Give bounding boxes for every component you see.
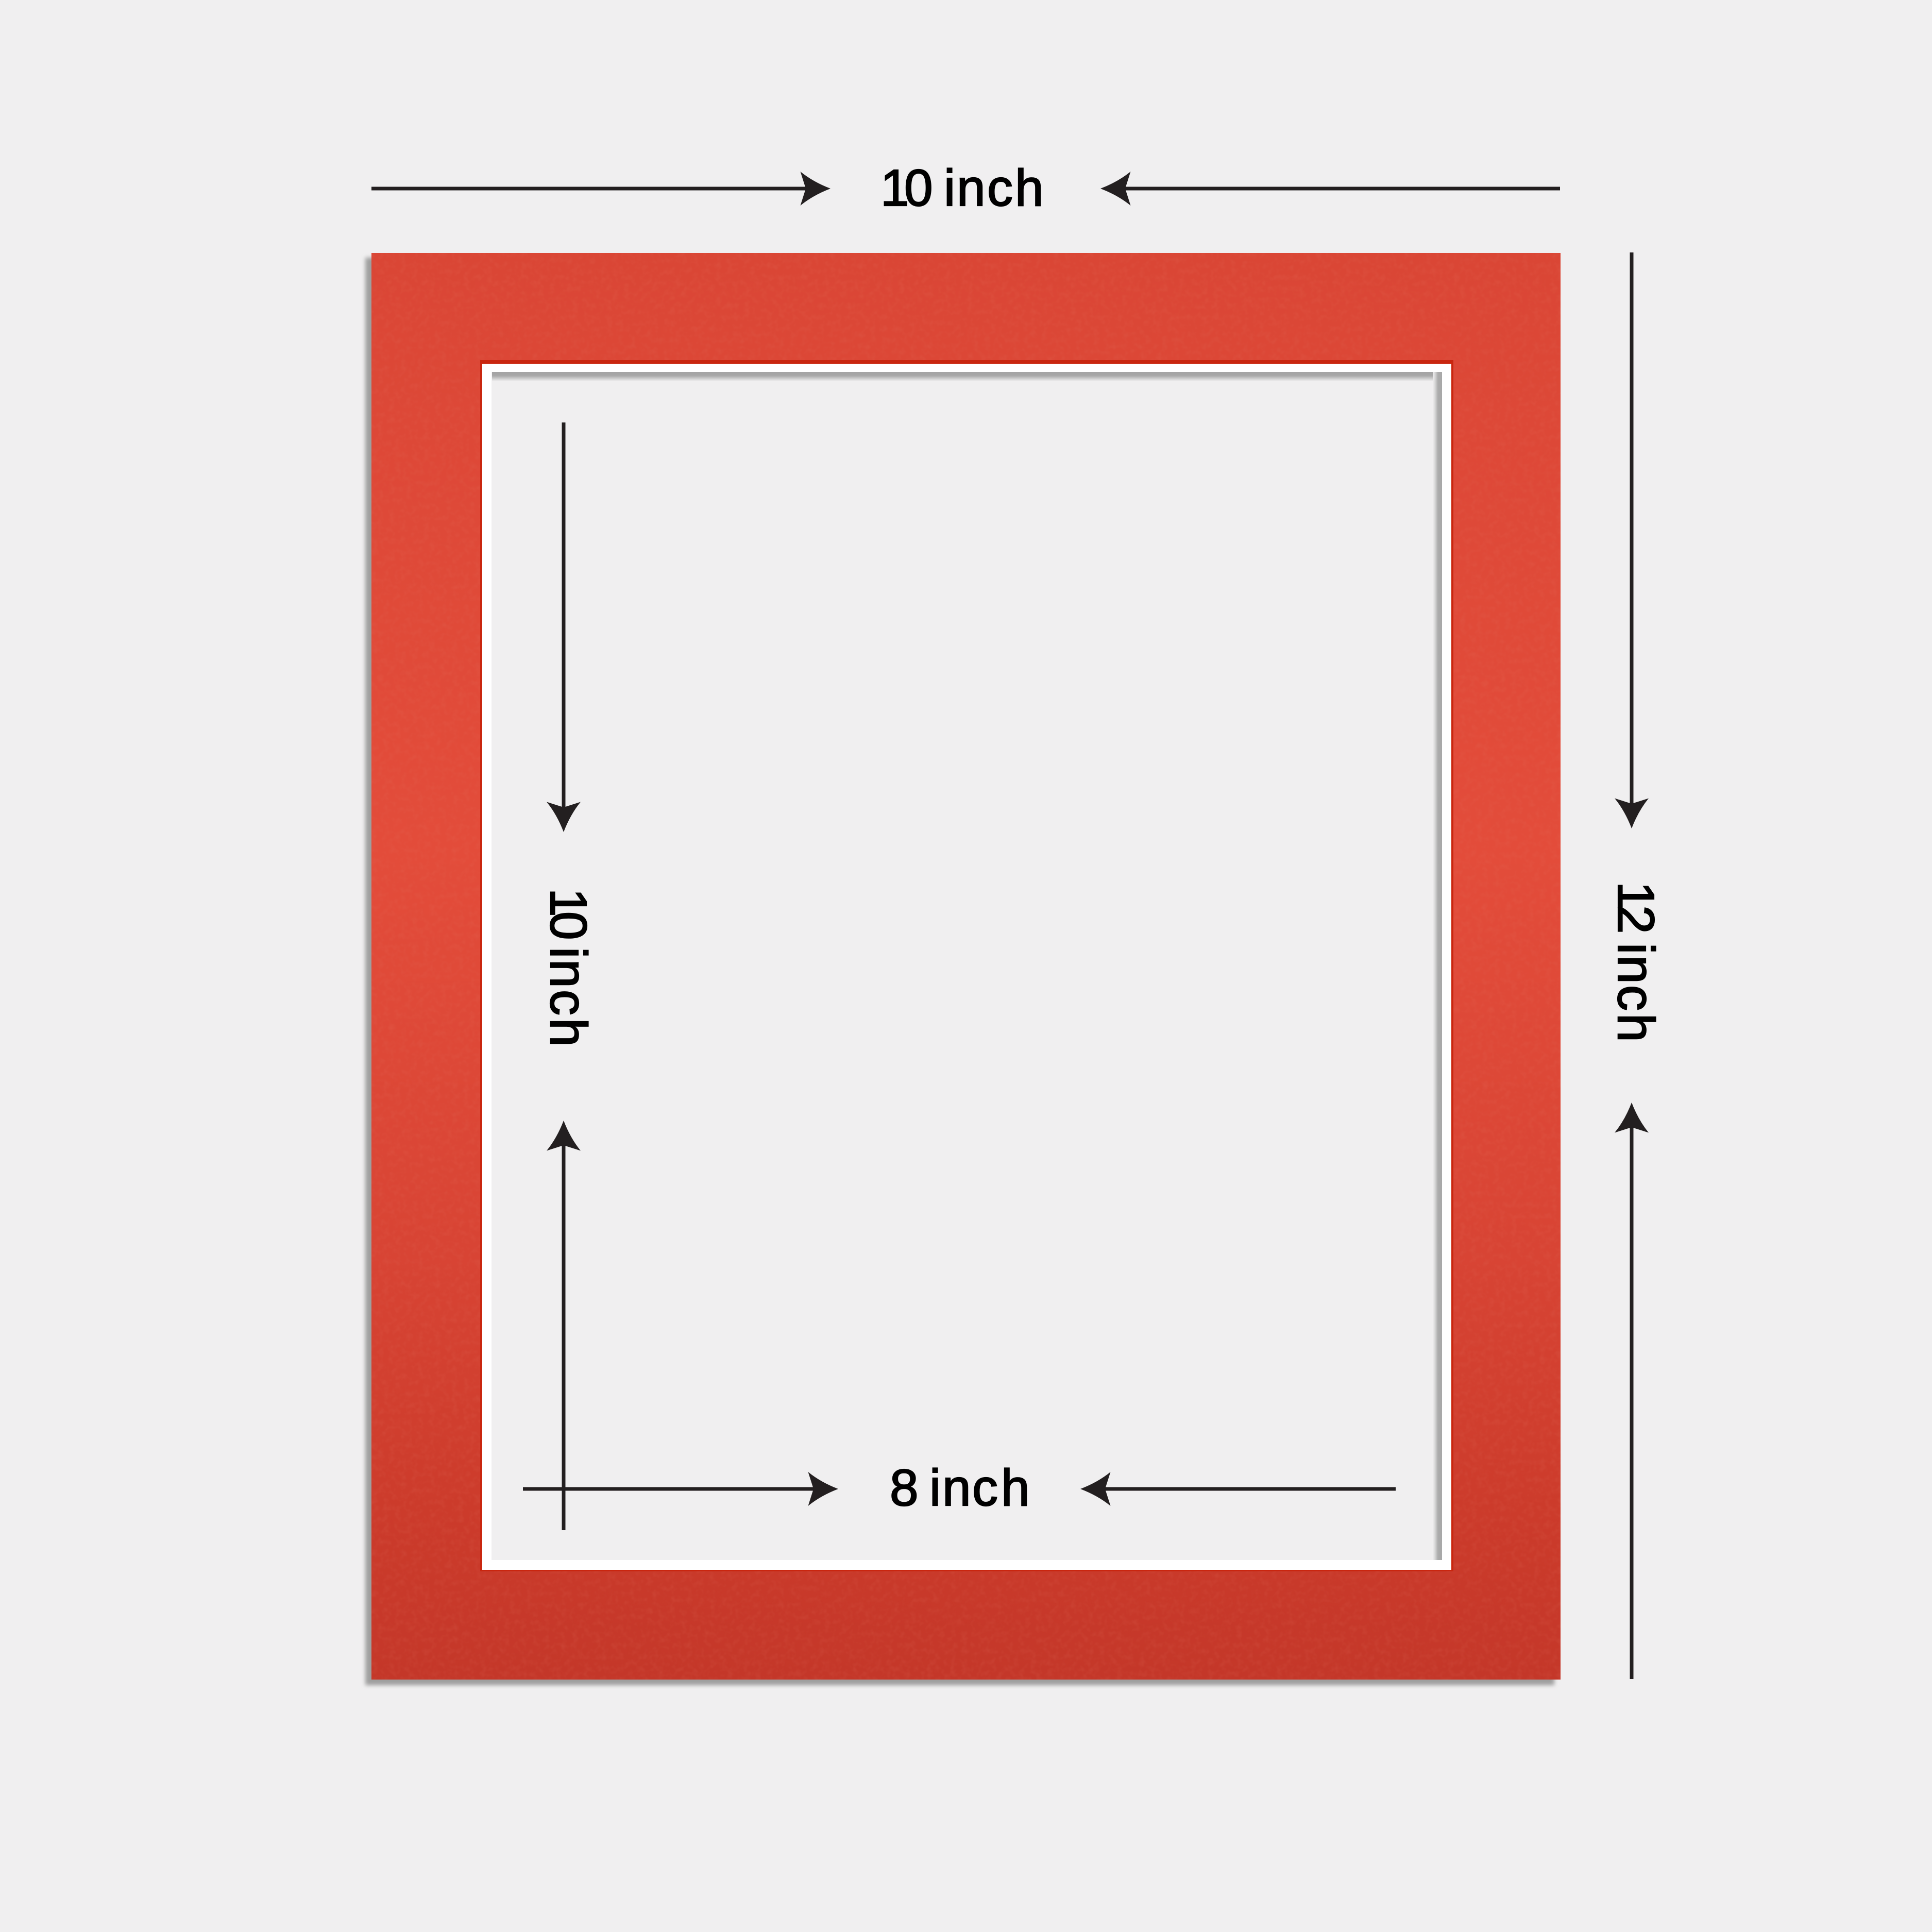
arrow: top pointing down <box>1615 252 1649 828</box>
label: 8 inch width: 8 inch <box>890 1459 1030 1517</box>
arrow: left pointing right <box>523 1472 838 1506</box>
mat opening bevel edge <box>480 360 1453 1571</box>
dimension: inner height 10 inch <box>539 422 597 1530</box>
arrow: bottom pointing up <box>1615 1103 1649 1679</box>
label: 12 inch height: 12 inch <box>1607 882 1665 1042</box>
panel: red mat board <box>371 253 1561 1680</box>
mat paper texture <box>415 1490 1377 1670</box>
label: 10 inch width: 10 inch <box>880 159 1044 217</box>
infographic: mat board with dimensions <box>363 167 1656 1688</box>
arrow: bottom pointing up <box>547 1121 581 1530</box>
dimension: outer width 10 inch <box>371 159 1560 217</box>
arrow: left pointing right <box>371 172 831 206</box>
label: 10 inch inner height: 10 inch <box>539 888 597 1047</box>
inner right shadow <box>1433 372 1442 1560</box>
white bevel <box>482 364 1451 1570</box>
mat board drop shadow <box>365 258 1554 1685</box>
opening interior <box>492 372 1442 1560</box>
inner top shadow <box>492 372 1442 381</box>
mat board surface <box>371 253 1561 1680</box>
dimension: outer height 12 inch <box>1607 252 1665 1679</box>
arrow: right pointing left <box>1100 172 1560 206</box>
arrow: right pointing left <box>1080 1472 1396 1506</box>
arrow: top pointing down <box>547 422 581 832</box>
dimension: inner width 8 inch <box>523 1459 1396 1517</box>
